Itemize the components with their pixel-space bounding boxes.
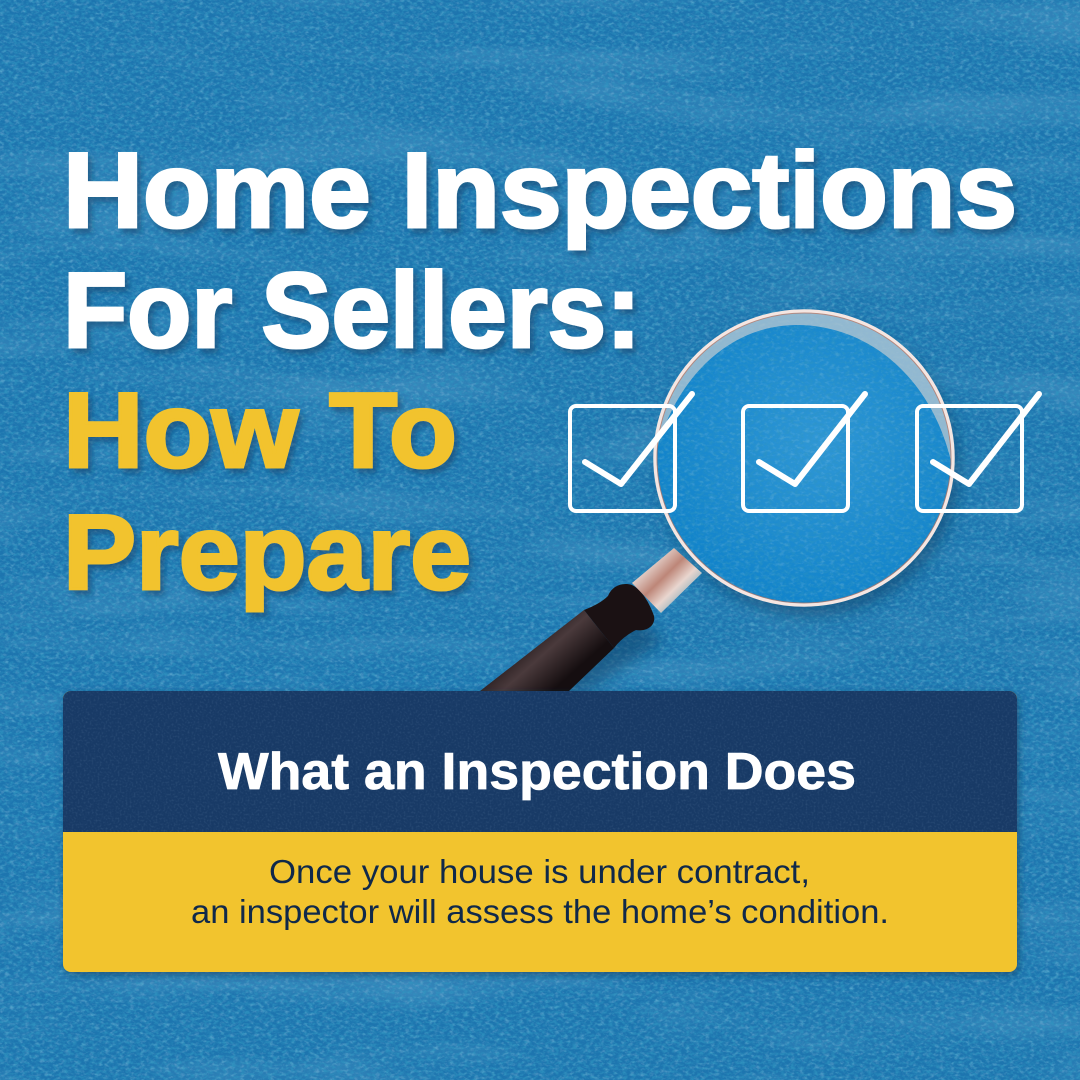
lens and handle shadow	[500, 320, 960, 692]
title line 3: How To	[63, 370, 457, 490]
panel body text: an inspector will assess the home’s condition.	[191, 893, 889, 930]
title line 1: Home Inspections	[63, 130, 1017, 250]
title line 4: Prepare	[63, 492, 471, 612]
panel heading: What an Inspection Does	[218, 743, 856, 801]
icon: checkbox 1	[570, 394, 692, 511]
title	[63, 130, 1017, 612]
handle	[480, 548, 702, 691]
lens rim	[655, 311, 953, 605]
title line 2: For Sellers:	[63, 250, 641, 370]
panel: what an inspection does	[63, 691, 1017, 972]
icon: checkbox 3	[917, 394, 1039, 511]
icon: checkbox 2	[743, 394, 865, 511]
icon: magnifying glass	[480, 308, 960, 692]
panel header	[63, 691, 1017, 832]
lens glass	[650, 308, 960, 610]
panel body text: Once your house is under contract,	[269, 853, 810, 890]
